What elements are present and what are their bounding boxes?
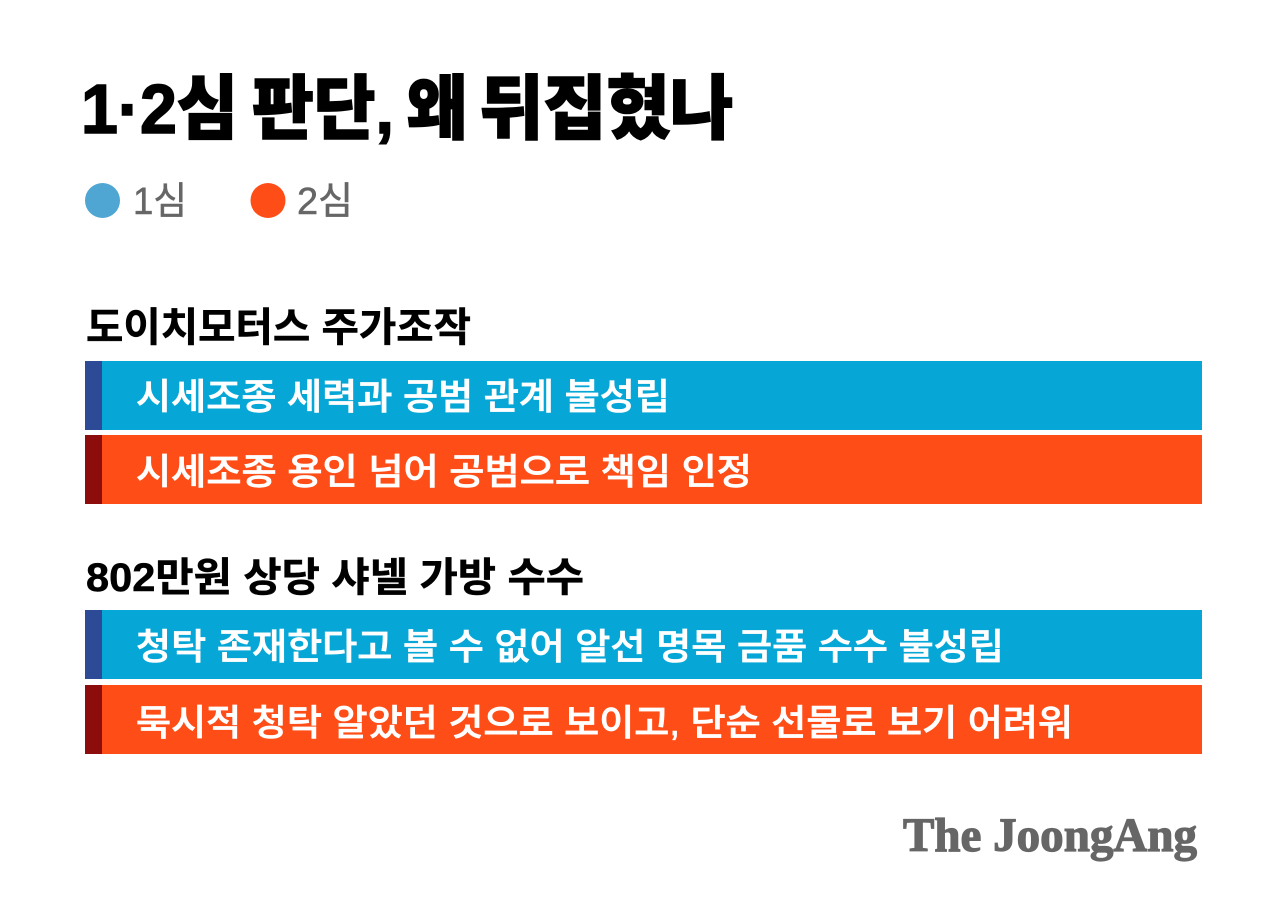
row: second trial, Chanel bag (85, 685, 1202, 754)
row: first trial, stock manipulation (85, 361, 1202, 430)
row: first trial, Chanel bag: 청탁 존재한다고 볼 수 없어 알선 명목 금품 수수 불성립 (136, 626, 1004, 667)
row: second trial, stock manipulation (85, 435, 1202, 504)
legend item: 2심 (250, 181, 353, 223)
row: second trial, Chanel bag: 묵시적 청탁 알았던 것으로 보이고, 단순 선물로 보기 어려워 (136, 702, 1073, 743)
title (81, 70, 733, 148)
title: 왜 (407, 70, 467, 148)
section heading: 도이치모터스 주가조작: 도이치모터스 주가조작 (86, 306, 471, 350)
title: 1·2심 (81, 70, 238, 148)
title: 판단, (252, 70, 394, 148)
row: second trial, stock manipulation: 시세조종 용인 넘어 공범으로 책임 인정 (136, 451, 752, 492)
logo: The JoongAng: The JoongAng (903, 809, 1197, 862)
row: first trial, Chanel bag (85, 610, 1202, 679)
legend (85, 181, 353, 223)
legend item: 2심: 2심 (297, 181, 353, 223)
row: first trial, stock manipulation: 시세조종 세력과 공범 관계 불성립 (136, 376, 670, 417)
title: 뒤집혔나 (480, 70, 733, 148)
legend item: 1심: 1심 (133, 181, 187, 223)
section heading: 802만원 상당 샤넬 가방 수수: 802만원 상당 샤넬 가방 수수 (86, 556, 584, 600)
legend item: 1심 (85, 181, 187, 223)
